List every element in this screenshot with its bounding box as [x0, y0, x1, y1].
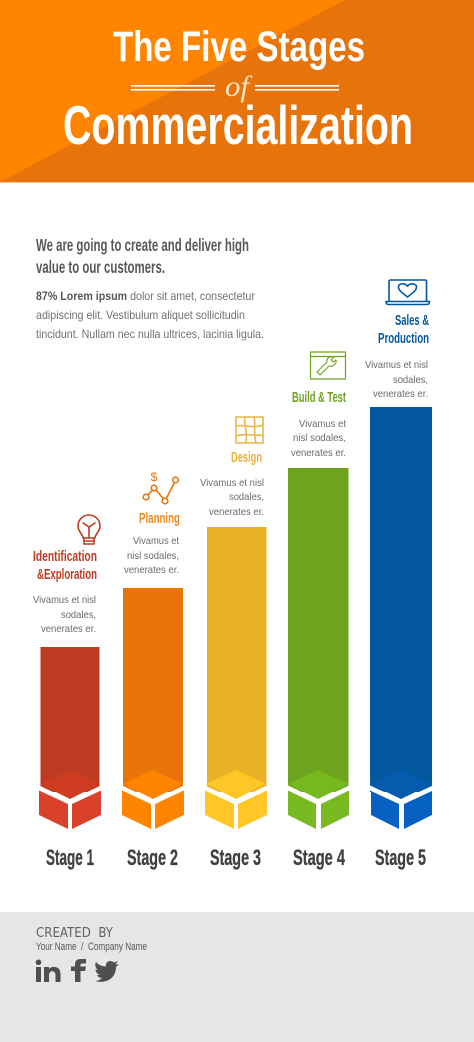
cube 1 [38, 770, 102, 829]
icon: browser with wrench [310, 352, 346, 379]
text: stage 2 description: venerates er. [124, 564, 179, 576]
intro heading: We are going to create and deliver high [36, 235, 249, 255]
label: stage 2: Stage 2 [127, 845, 178, 870]
text: stage 3 description: sodales, [229, 491, 264, 503]
title [63, 23, 413, 156]
stage 2 column [121, 588, 185, 870]
stage 4 column [287, 468, 350, 870]
label: stage 1: Stage 1 [46, 845, 94, 870]
text: stage 5 description: venerates er. [373, 388, 428, 400]
heading: identification and exploration: Identification [33, 548, 97, 565]
cube 5 [369, 770, 434, 829]
heading: sales and production [378, 312, 429, 347]
icon: design grid [236, 417, 263, 443]
icon: chart with dollar [143, 470, 178, 504]
text: stage 4 description: Vivamus et [299, 418, 346, 430]
stage 3 column [204, 527, 268, 870]
text: stage 2 description [124, 535, 179, 576]
heading: identification and exploration: &Exploration [37, 566, 97, 583]
text: stage 3 description: venerates er. [209, 506, 264, 518]
text: stage 2 description: nisl sodales, [127, 550, 179, 562]
cube 3 [204, 770, 268, 829]
text: stage 4 description: nisl sodales, [293, 432, 346, 444]
footer credits [36, 926, 147, 953]
label: stage 4: Stage 4 [293, 845, 346, 870]
title: of [225, 70, 253, 103]
bar 1 [40, 647, 100, 792]
title: The Five Stages [113, 23, 365, 71]
bar 5 [370, 407, 432, 792]
text: stage 1 description: sodales, [61, 609, 96, 621]
heading: identification and exploration [33, 548, 97, 583]
text: stage 5 description [365, 359, 428, 400]
intro text [36, 289, 264, 341]
text: stage 2 description: Vivamus et [133, 535, 179, 547]
label: stage 3: Stage 3 [210, 845, 261, 870]
bar 3 [207, 527, 266, 792]
text: stage 4 description [291, 418, 346, 459]
text: stage 4 description: venerates er. [291, 447, 346, 459]
icon: twitter [95, 961, 119, 982]
intro heading: value to our customers. [36, 257, 165, 277]
stage 5 column [369, 407, 434, 870]
heading: sales and production: Sales & [395, 312, 429, 329]
footer panel [0, 912, 474, 1042]
icon: laptop with heart [386, 280, 430, 304]
label: stage 5: Stage 5 [375, 845, 426, 870]
bar 2 [123, 588, 183, 792]
heading: planning: Planning [139, 510, 180, 527]
footer credits: Your Name / Company Name [36, 941, 147, 953]
intro text: 87% Lorem ipsum dolor sit amet, consectetur [36, 289, 255, 303]
heading: sales and production: Production [378, 330, 429, 347]
icon: light bulb [78, 515, 100, 544]
text: stage 1 description [33, 594, 96, 635]
heading: build and test: Build & Test [292, 389, 346, 406]
text: stage 5 description: Vivamus et nisl [365, 359, 428, 371]
cube 2 [121, 770, 185, 829]
footer credits: CREATED BY [36, 926, 113, 941]
intro text: tincidunt. Nullam nec nulla ultrices, lacinia ligula. [36, 327, 264, 341]
icon: facebook [71, 959, 86, 982]
heading: design: Design [231, 449, 262, 466]
stage 1 column [38, 647, 102, 870]
header banner [0, 0, 474, 183]
cube 4 [287, 770, 350, 829]
text: stage 3 description [200, 477, 264, 518]
text: stage 1 description: venerates er. [41, 623, 96, 635]
text: stage 1 description: Vivamus et nisl [33, 594, 96, 606]
intro text: adipiscing elit. Vestibulum aliquet sollicitudin [36, 308, 245, 322]
text: stage 3 description: Vivamus et nisl [200, 477, 264, 489]
text: stage 5 description: sodales, [393, 374, 428, 386]
bar 4 [288, 468, 348, 792]
icon: linkedin [36, 960, 60, 982]
icon: chart with dollar: $ [151, 470, 158, 484]
intro heading [36, 235, 249, 277]
